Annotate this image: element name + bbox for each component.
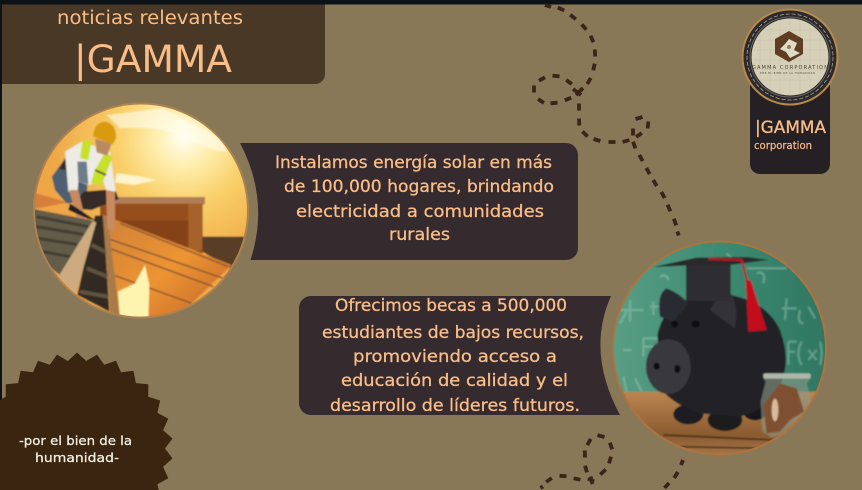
scholarships statement: desarrollo de líderes futuros.	[330, 396, 580, 416]
solar energy statement: rurales	[389, 225, 450, 245]
dashed trail: upper route	[534, 5, 679, 236]
face and helmet	[95, 138, 112, 156]
worker arms	[69, 190, 85, 218]
photo: piggy bank with graduation cap	[607, 235, 833, 458]
header title: |GAMMA	[74, 38, 232, 81]
scholarships statement: educación de calidad y el	[341, 371, 568, 391]
brand name: |GAMMA	[755, 118, 827, 137]
logo wordmark: GAMMA CORPORATION	[752, 65, 828, 71]
solar energy statement: de 100,000 hogares, brindando	[284, 177, 554, 197]
solar energy statement: electricidad a comunidades	[296, 202, 544, 222]
brand descriptor: corporation	[754, 139, 812, 152]
badge slogan	[19, 433, 132, 465]
panel: solar energy text	[240, 143, 578, 260]
jar of coins	[761, 378, 812, 437]
scholarships statement: promoviendo acceso a	[353, 347, 557, 367]
worker legs	[52, 152, 88, 203]
logo hexagon mark	[775, 31, 803, 62]
logo tagline: POR EL BIEN DE LA HUMANIDAD	[760, 71, 815, 75]
header panel	[2, 4, 325, 84]
solar energy statement: Instalamos energía solar en más	[275, 153, 552, 173]
solar energy statement	[275, 153, 554, 245]
scholarships statement	[322, 296, 584, 416]
pig	[673, 404, 703, 424]
right roof	[108, 219, 232, 316]
starburst badge	[0, 352, 172, 490]
panel: scholarships text	[299, 296, 620, 416]
dashed trail: lower route	[540, 435, 683, 488]
brand card	[742, 8, 838, 174]
table	[623, 390, 816, 454]
tassel	[708, 259, 747, 280]
scholarships statement: estudiantes de bajos recursos,	[322, 323, 584, 343]
photo: worker installing solar roof	[30, 100, 253, 325]
logo seal	[742, 8, 838, 106]
worker torso	[65, 142, 116, 195]
gutter	[77, 216, 109, 312]
graduation cap	[686, 264, 731, 301]
building	[115, 197, 205, 204]
left roof	[30, 208, 95, 275]
header subtitle: noticias relevantes	[57, 8, 243, 29]
badge slogan: -por el bien de la	[19, 433, 132, 448]
scholarships statement: Ofrecimos becas a 500,000	[335, 296, 567, 316]
badge slogan: humanidad-	[35, 450, 119, 465]
